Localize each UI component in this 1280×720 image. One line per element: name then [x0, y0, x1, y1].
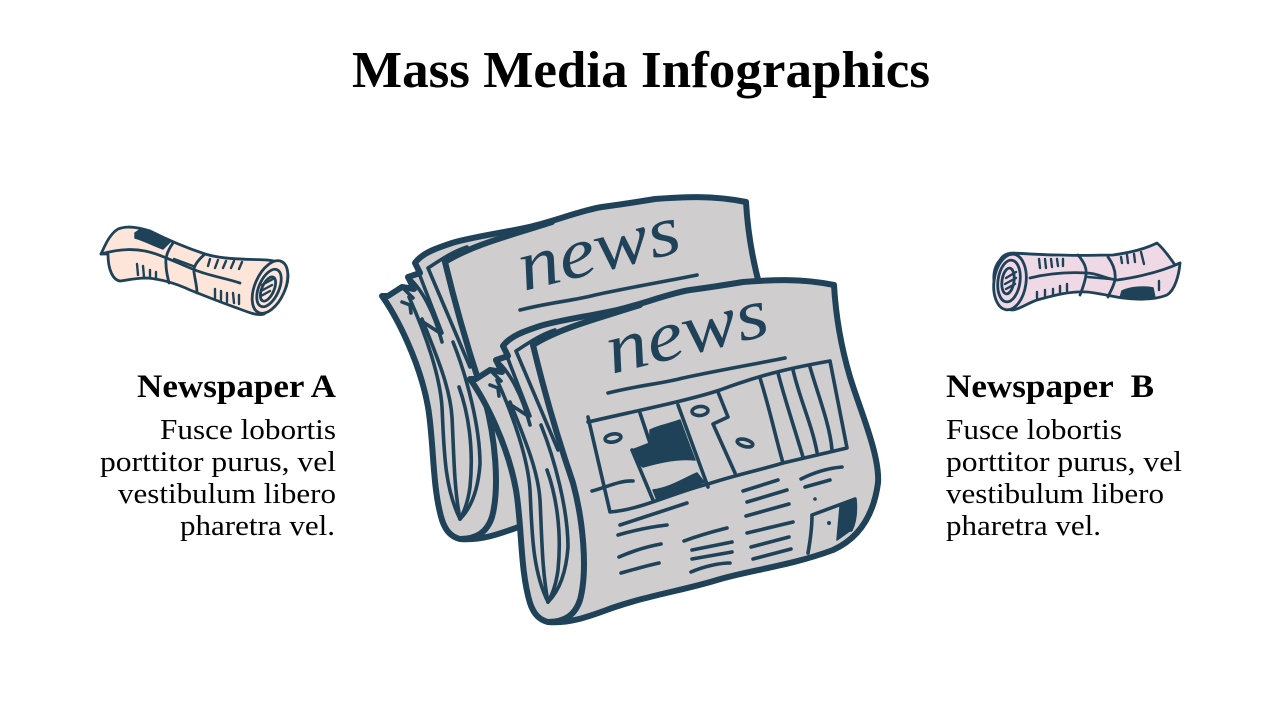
text: front masthead: news — [596, 272, 776, 389]
icon: left rolled newspaper — [101, 227, 295, 319]
text block: newspaper B — [946, 369, 1182, 542]
photo box — [588, 361, 847, 512]
body: newspaper B: pharetra vel. — [946, 511, 1101, 542]
heading: newspaper B: Newspaper B — [946, 369, 1154, 405]
body: newspaper A: pharetra vel. — [180, 511, 335, 542]
text: back masthead: news — [508, 189, 688, 306]
body: newspaper B — [946, 415, 1182, 542]
icon: right rolled newspaper — [990, 243, 1180, 312]
heading: newspaper A: Newspaper A — [137, 369, 336, 405]
body: newspaper B: vestibulum libero — [946, 479, 1164, 510]
body: newspaper A — [100, 415, 336, 542]
icon: back newspaper — [382, 189, 790, 539]
icon: front newspaper — [470, 272, 878, 622]
body: newspaper A: porttitor purus, vel — [100, 447, 336, 478]
headline lines — [618, 467, 842, 573]
text block: newspaper A — [100, 369, 336, 542]
corner fold — [808, 497, 855, 553]
body: newspaper B: porttitor purus, vel — [946, 447, 1182, 478]
body: newspaper B: Fusce lobortis — [946, 415, 1122, 446]
body: newspaper A: vestibulum libero — [118, 479, 336, 510]
title: Mass Media Infographics — [352, 42, 930, 99]
body: newspaper A: Fusce lobortis — [160, 415, 336, 446]
